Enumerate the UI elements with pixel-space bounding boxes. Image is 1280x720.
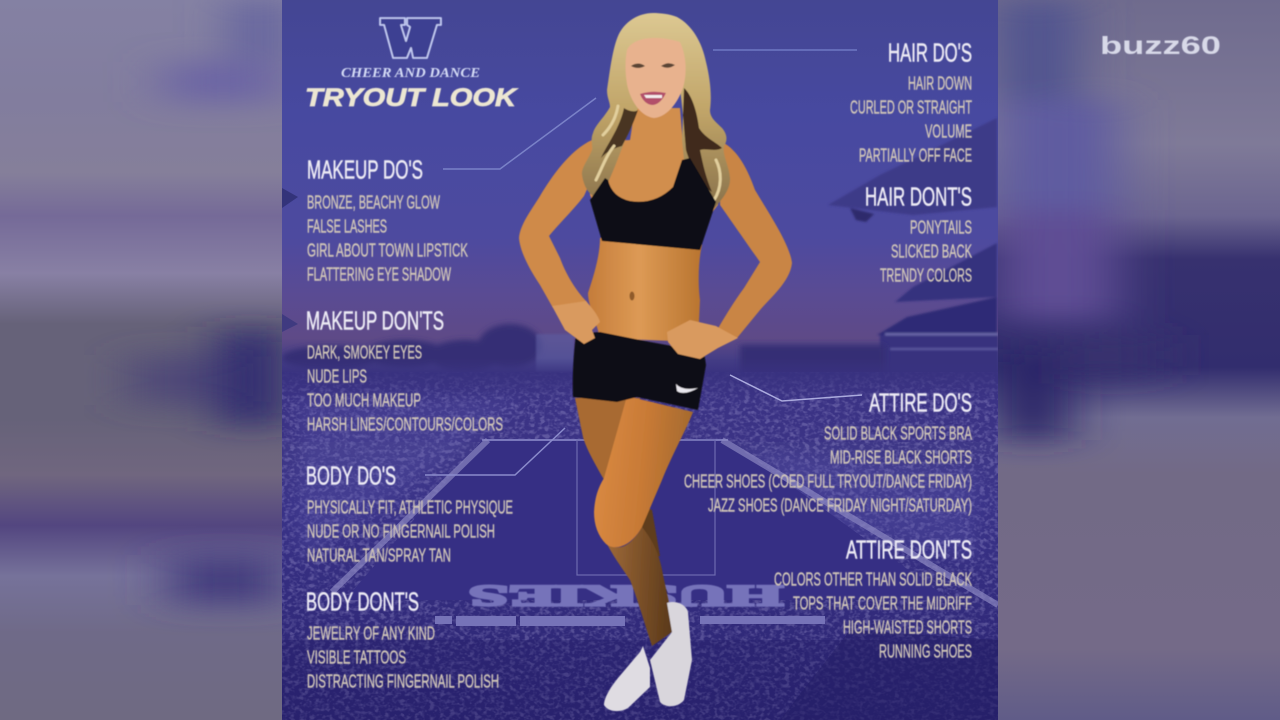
text block: attire do's: ATTIRE DO'S	[869, 388, 972, 418]
left arm	[519, 140, 600, 308]
text block: body don'ts: JEWELRY OF ANY KIND	[307, 622, 435, 644]
text block: hair do's: PARTIALLY OFF FACE	[859, 144, 972, 166]
text block: makeup do's	[307, 154, 468, 284]
text block: attire do's: JAZZ SHOES (DANCE FRIDAY NIGHT/SATURDAY)	[708, 494, 972, 516]
text block: makeup don'ts: NUDE LIPS	[307, 366, 367, 386]
leader line: attire	[730, 375, 862, 401]
left hand	[552, 301, 600, 344]
horizon fade	[282, 362, 998, 396]
text block: body do's: NUDE OR NO FINGERNAIL POLISH	[307, 520, 495, 542]
lower crowd shading	[282, 640, 841, 720]
back calf shadow	[642, 508, 660, 557]
tree line	[282, 322, 882, 366]
logo: buzz60 watermark: buzz60	[1100, 32, 1221, 60]
text block: hair don'ts: PONYTAILS	[910, 216, 972, 238]
lips	[640, 92, 666, 105]
figure: cheerleader	[519, 13, 792, 711]
dark hair shadow right	[683, 88, 722, 192]
leader line: makeup	[443, 98, 596, 169]
text block: attire don'ts: COLORS OTHER THAN SOLID BLACK	[774, 568, 972, 590]
text block: attire do's: CHEER SHOES (COED FULL TRYOUT/DANCE FRIDAY)	[684, 470, 972, 492]
stadium stands right	[828, 118, 998, 385]
back leg	[575, 398, 640, 490]
crowd	[282, 372, 998, 720]
text block: hair don'ts: HAIR DONT'S	[865, 182, 972, 212]
text block: makeup do's: BRONZE, BEACHY GLOW	[307, 192, 440, 212]
text block: body do's: PHYSICALLY FIT, ATHLETIC PHYSIQUE	[307, 496, 513, 518]
hair wave highlights	[596, 106, 720, 200]
text block: body do's	[306, 460, 513, 566]
navel	[630, 292, 634, 300]
text block: body don'ts: DISTRACTING FINGERNAIL POLISH	[307, 670, 499, 692]
text block: attire don'ts: ATTIRE DON'TS	[846, 534, 972, 564]
stadium background	[282, 0, 998, 720]
text block: body don'ts: VISIBLE TATTOOS	[307, 646, 406, 668]
face	[626, 38, 686, 118]
shorts	[573, 332, 706, 410]
text block: makeup do's: MAKEUP DO'S	[307, 154, 423, 184]
text block: makeup don'ts: DARK, SMOKEY EYES	[307, 342, 422, 362]
crowd light patches	[308, 408, 968, 550]
text block: attire do's	[684, 388, 972, 516]
text block: hair don'ts	[865, 182, 972, 286]
text block: makeup don'ts	[306, 306, 503, 434]
right arm	[716, 142, 792, 338]
torso	[588, 238, 702, 342]
subtitle: CHEER AND DANCE	[341, 66, 480, 81]
dark hair shadow left	[601, 108, 638, 158]
sports bra	[590, 158, 716, 250]
swoosh logo	[676, 384, 698, 393]
text block: attire do's: MID-RISE BLACK SHORTS	[830, 446, 972, 468]
text block: body don'ts: BODY DONT'S	[306, 586, 419, 616]
panel: blurred left backdrop	[0, 0, 282, 720]
text block: makeup don'ts: TOO MUCH MAKEUP	[307, 390, 421, 410]
logo: W emblem	[380, 18, 441, 58]
text block: hair do's	[850, 38, 972, 166]
sideline band	[435, 616, 825, 626]
text block: hair do's: HAIR DOWN	[908, 72, 972, 94]
panel: blurred right backdrop	[998, 0, 1280, 720]
text block: makeup do's: FALSE LASHES	[307, 216, 387, 236]
text block: body do's: NATURAL TAN/SPRAY TAN	[307, 544, 451, 566]
text block: makeup don'ts: HARSH LINES/CONTOURS/COLORS	[307, 414, 503, 434]
neck and chest	[589, 107, 718, 212]
text block: makeup don'ts: MAKEUP DON'TS	[306, 306, 444, 336]
text block: makeup do's: FLATTERING EYE SHADOW	[307, 264, 451, 284]
front thigh and knee	[594, 396, 693, 547]
text block: hair do's: VOLUME	[925, 120, 972, 142]
text block: hair do's: CURLED OR STRAIGHT	[850, 96, 972, 118]
right hand	[667, 320, 738, 359]
text block: attire do's: SOLID BLACK SPORTS BRA	[824, 422, 972, 444]
text block: body don'ts	[306, 586, 499, 692]
text block: attire don'ts: HIGH-WAISTED SHORTS	[843, 616, 972, 638]
text block: attire don'ts: TOPS THAT COVER THE MIDRIFF	[793, 592, 972, 614]
leader line: body	[425, 428, 565, 475]
title: TRYOUT LOOK	[305, 84, 518, 112]
left stand edge	[282, 188, 298, 208]
football field	[345, 440, 950, 600]
text block: hair don'ts: TRENDY COLORS	[880, 264, 972, 286]
hair mass	[582, 13, 730, 212]
calf	[604, 527, 675, 646]
text block: makeup do's: GIRL ABOUT TOWN LIPSTICK	[307, 240, 468, 260]
leader line: hair	[713, 49, 857, 51]
text block: body do's: BODY DO'S	[306, 460, 396, 490]
panel: central poster	[282, 0, 998, 720]
text block: attire don'ts: RUNNING SHOES	[879, 640, 972, 662]
right shoe	[650, 602, 692, 706]
left shoe	[604, 646, 650, 711]
eyes	[631, 63, 675, 68]
text block: hair don'ts: SLICKED BACK	[891, 240, 972, 262]
end zone lettering: HUSKIES	[469, 579, 783, 612]
text block: hair do's: HAIR DO'S	[888, 38, 972, 68]
text block: attire don'ts	[774, 534, 972, 662]
